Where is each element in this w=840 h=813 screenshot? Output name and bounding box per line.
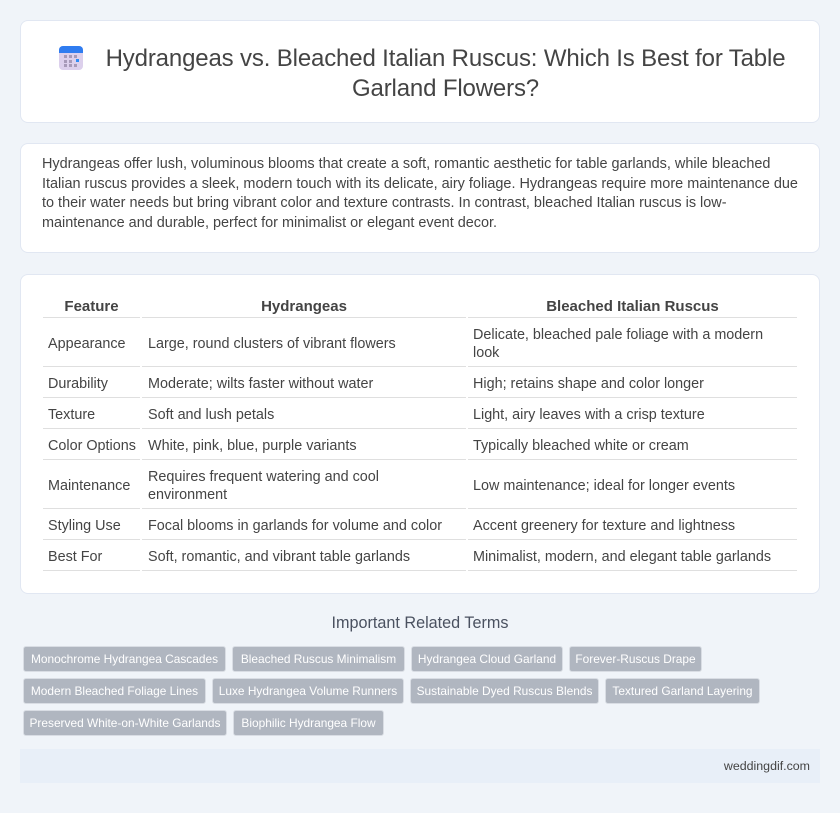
row: Texture: Texture	[48, 407, 95, 423]
title: Garland Flowers?	[352, 75, 539, 102]
comparison table: Minimalist, modern, and elegant table garlands	[473, 549, 771, 565]
comparison table: Typically bleached white or cream	[473, 438, 689, 454]
comparison table: Soft and lush petals	[148, 407, 274, 423]
icon: calendar	[59, 46, 83, 70]
footer bar	[20, 749, 820, 783]
tag	[605, 678, 760, 704]
comparison table: High; retains shape and color longer	[473, 376, 704, 392]
tag: Biophilic Hydrangea Flow	[241, 716, 376, 730]
comparison table: Requires frequent watering and cool	[148, 469, 379, 485]
footer source text: weddingdif.com	[724, 759, 810, 773]
row: Maintenance: Maintenance	[48, 478, 130, 494]
tag: Forever-Ruscus Drape	[575, 652, 696, 666]
comparison table: White, pink, blue, purple variants	[148, 438, 357, 454]
tag	[23, 710, 227, 736]
tag	[23, 678, 206, 704]
tag: Sustainable Dyed Ruscus Blends	[417, 684, 592, 698]
title card	[20, 20, 820, 123]
header: Feature: Feature	[64, 298, 119, 315]
tag: Luxe Hydrangea Volume Runners	[219, 684, 397, 698]
intro text: Italian ruscus provides a sleek, modern touch with its delicate, airy foliage. Hydrangeas require more maintenance due	[42, 176, 798, 192]
tag: Monochrome Hydrangea Cascades	[31, 652, 218, 666]
row: Color Options: Color Options	[48, 438, 136, 454]
row: Best For: Best For	[48, 549, 102, 565]
title: Hydrangeas vs. Bleached Italian Ruscus: Which Is Best for Table	[106, 45, 785, 72]
intro text: to their water needs but bring vibrant color and texture contrasts. In contrast, bleached Italian ruscus is low-	[42, 195, 727, 211]
title	[106, 45, 785, 102]
comparison table: Low maintenance; ideal for longer events	[473, 478, 735, 494]
related terms heading: Important Related Terms	[332, 614, 508, 632]
comparison table: Large, round clusters of vibrant flowers	[148, 336, 396, 352]
header: Hydrangeas: Hydrangeas	[261, 298, 347, 315]
tag: Modern Bleached Foliage Lines	[31, 684, 198, 698]
tag: Bleached Ruscus Minimalism	[241, 652, 396, 666]
tag	[23, 646, 226, 672]
comparison table: Soft, romantic, and vibrant table garlands	[148, 549, 410, 565]
intro card	[20, 143, 820, 253]
tag	[411, 646, 563, 672]
comparison table: Moderate; wilts faster without water	[148, 376, 373, 392]
comparison table: Light, airy leaves with a crisp texture	[473, 407, 705, 423]
tag: Textured Garland Layering	[612, 684, 753, 698]
related term tags	[23, 646, 760, 736]
comparison table: look	[473, 345, 499, 361]
tag	[569, 646, 702, 672]
comparison table: environment	[148, 487, 227, 503]
intro text: Hydrangeas offer lush, voluminous blooms that create a soft, romantic aesthetic for table garlands, while bleached	[42, 156, 770, 172]
comparison table: Focal blooms in garlands for volume and color	[148, 518, 442, 534]
row: Durability: Durability	[48, 376, 108, 392]
tag	[212, 678, 404, 704]
comparison table card	[20, 274, 820, 594]
header: Bleached Italian Ruscus: Bleached Italian Ruscus	[546, 298, 719, 315]
row: Appearance: Appearance	[48, 336, 126, 352]
tag: Hydrangea Cloud Garland	[418, 652, 556, 666]
intro text	[42, 156, 798, 230]
tag: Preserved White-on-White Garlands	[30, 716, 220, 730]
row: Styling Use: Styling Use	[48, 518, 121, 534]
comparison table: Accent greenery for texture and lightness	[473, 518, 735, 534]
intro text: maintenance and durable, perfect for minimalist or elegant event decor.	[42, 214, 497, 230]
comparison table: Delicate, bleached pale foliage with a modern	[473, 327, 763, 343]
tag	[232, 646, 405, 672]
tag	[233, 710, 384, 736]
tag	[410, 678, 599, 704]
